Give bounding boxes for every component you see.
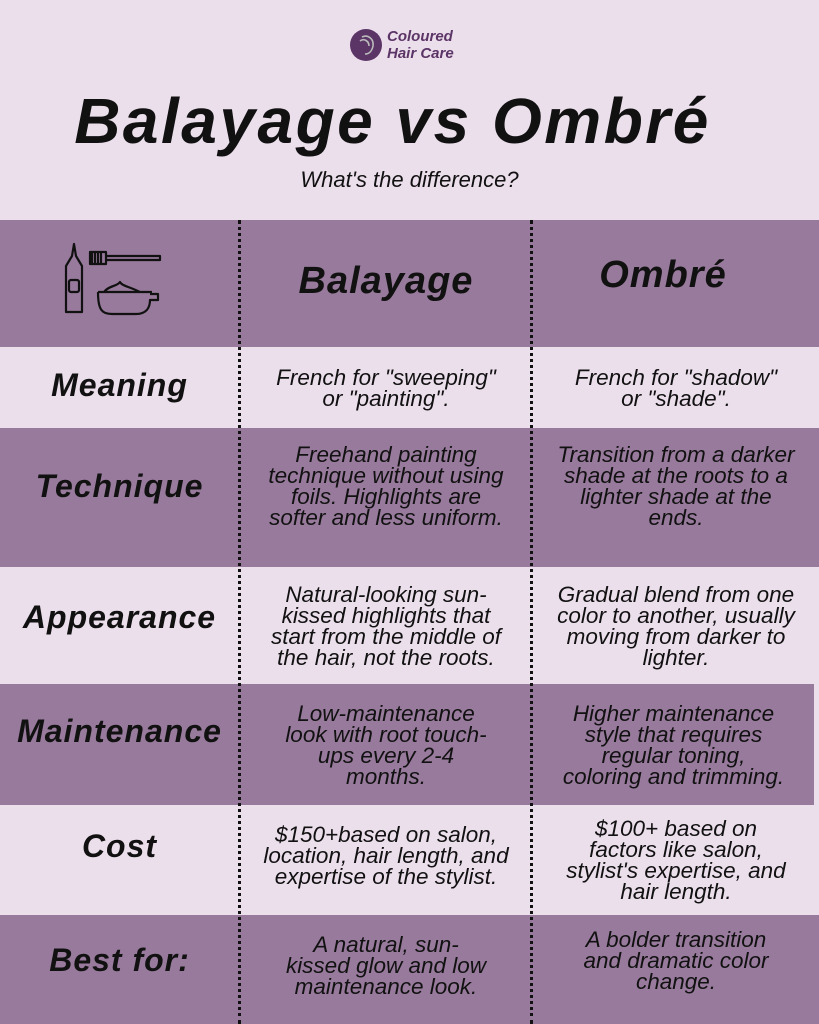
row: Cost: stylist's expertise, and: [566, 858, 786, 883]
row: Meaning: or "painting".: [322, 386, 450, 410]
title: Balayage vs Ombré: [74, 85, 711, 157]
row: Meaning: French for "sweeping": [276, 364, 496, 390]
row: Appearance: lighter.: [643, 644, 709, 670]
row: Technique: Freehand painting: [295, 442, 477, 467]
row: Technique: ends.: [648, 505, 704, 530]
row: Best for: maintenance look.: [295, 974, 477, 998]
row: Appearance: color to another, usually: [557, 602, 795, 628]
row: Appearance: Appearance: [23, 598, 216, 634]
row: Best for: and dramatic color: [583, 948, 769, 972]
row: Cost: location, hair length, and: [263, 842, 509, 868]
row: Maintenance: [0, 684, 814, 805]
row: Best for: change.: [636, 968, 716, 994]
icon: hair dye tools: [64, 242, 162, 316]
header row: [0, 220, 819, 347]
row: Meaning: or "shade".: [621, 386, 731, 410]
row: Maintenance: ups every 2-4: [318, 742, 454, 768]
row: Appearance: kissed highlights that: [282, 602, 490, 628]
row: Cost: Cost: [82, 828, 157, 864]
row: Best for: kissed glow and low: [286, 952, 486, 978]
row: Maintenance: style that requires: [585, 722, 762, 746]
row: Cost: expertise of the stylist.: [275, 864, 497, 888]
subtitle: What's the difference?: [300, 167, 519, 192]
row: Meaning: French for "shadow": [575, 364, 777, 390]
column heading: Ombré: Ombré: [599, 254, 727, 296]
row: Appearance: [22, 582, 796, 670]
row: Maintenance: Maintenance: [17, 712, 222, 748]
row: Best for: [0, 915, 819, 1024]
row: Maintenance: regular toning,: [602, 742, 745, 768]
row: Best for: Best for:: [49, 942, 190, 978]
row: Cost: $100+ based on: [595, 816, 757, 841]
column heading: Balayage: Balayage: [299, 260, 473, 302]
row: Maintenance: coloring and trimming.: [563, 764, 784, 788]
row: Technique: Technique: [36, 468, 203, 504]
row: Appearance: Natural-looking sun-: [285, 582, 487, 606]
row: Maintenance: Low-maintenance: [297, 700, 475, 726]
row: Technique: Transition from a darker: [557, 442, 795, 467]
row: Appearance: start from the middle of: [271, 624, 501, 648]
row: Technique: shade at the roots to a: [564, 463, 788, 488]
row: Cost: hair length.: [620, 879, 732, 904]
logo: Hair Care: [387, 45, 454, 62]
row: Technique: softer and less uniform.: [269, 505, 503, 530]
row: Cost: $150+based on salon,: [275, 822, 497, 846]
row: Cost: factors like salon,: [589, 837, 763, 862]
row: Best for: A bolder transition: [586, 926, 766, 952]
logo: [350, 28, 454, 62]
row: Technique: [0, 428, 819, 567]
row: Maintenance: look with root touch-: [285, 722, 487, 746]
row: Technique: technique without using: [268, 463, 504, 488]
row: Appearance: Gradual blend from one: [558, 582, 794, 606]
row: Cost: [82, 816, 786, 904]
row: Technique: foils. Highlights are: [291, 484, 481, 509]
row: Best for: A natural, sun-: [313, 932, 459, 956]
row: Appearance: moving from darker to: [567, 624, 785, 648]
row: Maintenance: Higher maintenance: [573, 700, 774, 726]
logo: Coloured: [387, 28, 453, 45]
row: Appearance: the hair, not the roots.: [277, 644, 495, 670]
row: Maintenance: months.: [346, 764, 426, 788]
row: Meaning: [51, 364, 778, 410]
row: Technique: lighter shade at the: [580, 484, 772, 509]
row: Meaning: Meaning: [51, 366, 188, 402]
